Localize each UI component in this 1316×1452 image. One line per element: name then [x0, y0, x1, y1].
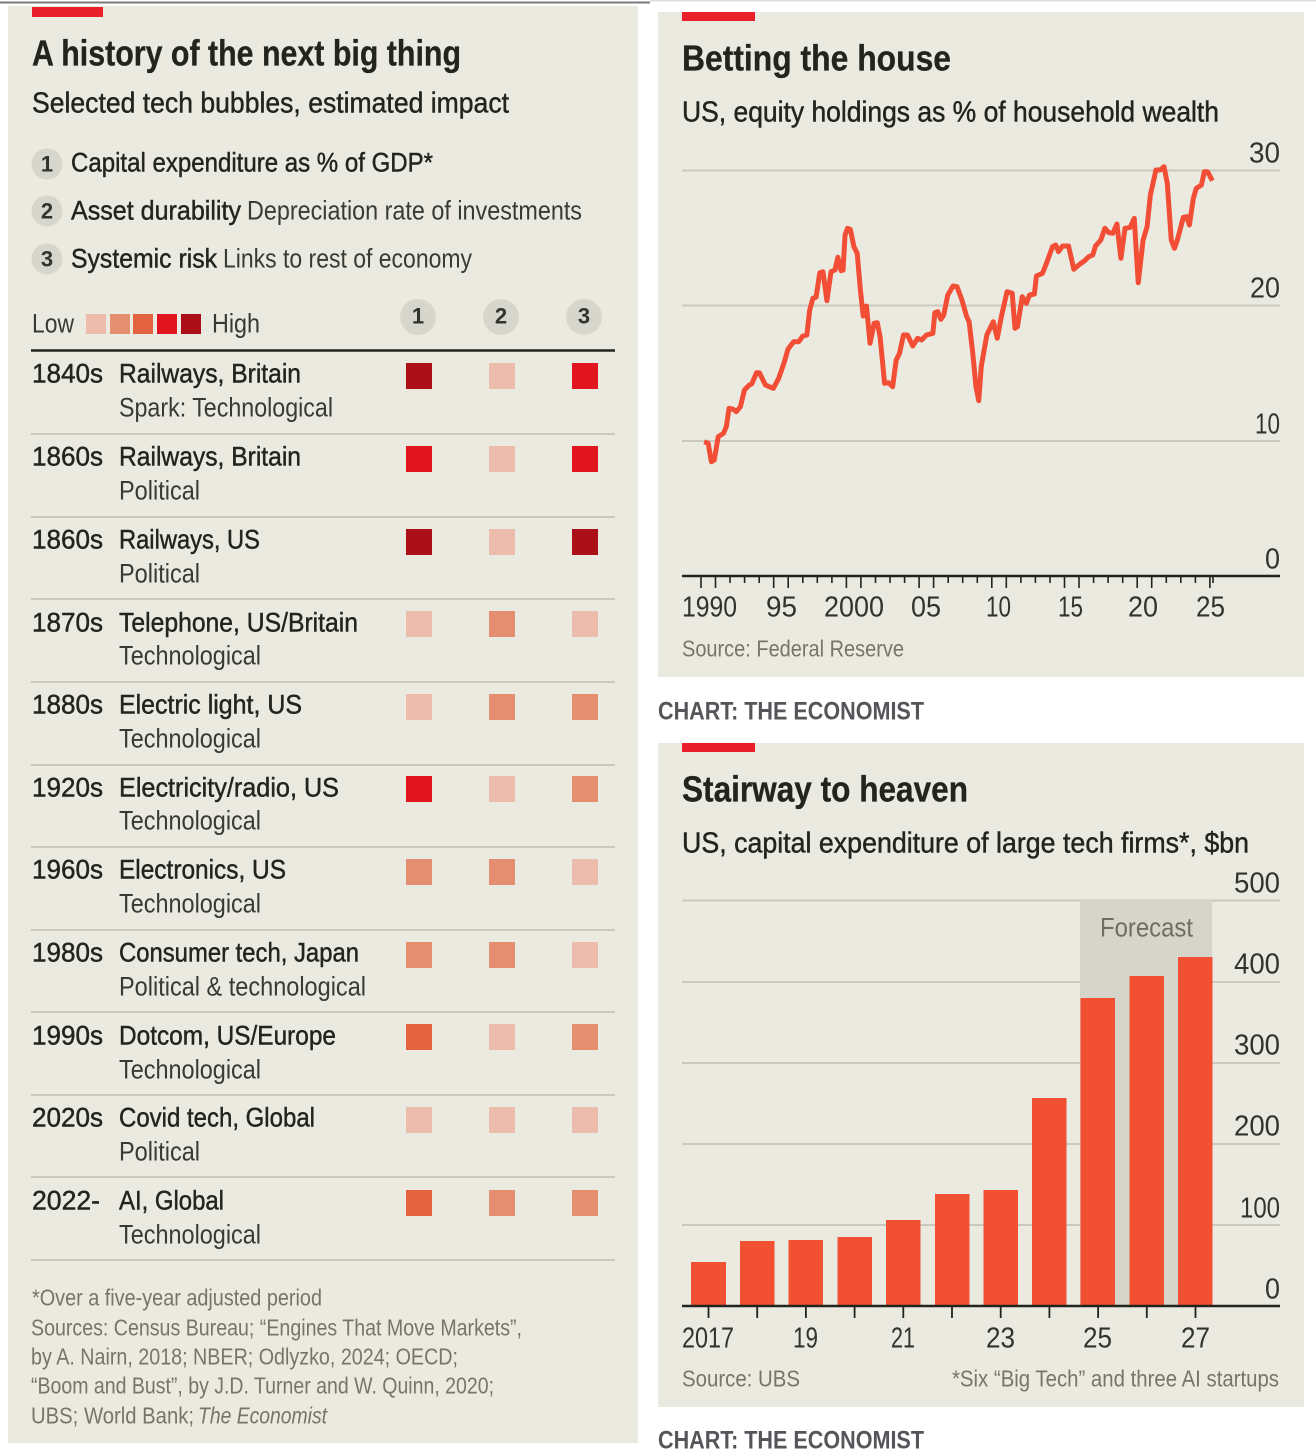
- row: 1960s Electronics: Technological: [119, 888, 261, 918]
- x axis labels: 20: [1128, 591, 1158, 623]
- panel: betting the house: [658, 12, 1304, 677]
- row: 1880s Electric light: Technological: [119, 723, 261, 753]
- y axis labels: 0: [1265, 1273, 1280, 1305]
- x axis labels: 95: [766, 591, 797, 623]
- red tab: [32, 7, 103, 17]
- red tab: [682, 12, 755, 21]
- y axis labels: 30: [1249, 137, 1280, 169]
- y axis labels: 10: [1255, 408, 1280, 440]
- key item 3: Systemic risk: [71, 243, 217, 273]
- key item 2: [32, 195, 582, 226]
- x axis labels: 1990: [682, 591, 737, 623]
- row: 1870s Telephone: 1870s: [32, 607, 103, 637]
- row: 1980s Consumer tech: [32, 937, 598, 1001]
- row: 2022- AI: Technological: [119, 1219, 261, 1249]
- x axis labels: 10: [986, 591, 1011, 623]
- x axis labels: 2017: [682, 1322, 734, 1354]
- panel: stairway to heaven: [658, 743, 1304, 1407]
- row: 1840s Railways, Britain: Railways, Britain: [119, 358, 301, 388]
- y axis labels: 20: [1250, 272, 1280, 304]
- panel: history of tech bubbles: [8, 6, 638, 1443]
- key item 3: 3: [41, 246, 53, 271]
- row: 1860s Railways, Britain: [32, 441, 598, 505]
- row: 1960s Electronics: 1960s: [32, 854, 103, 884]
- row: 1960s Electronics: [32, 854, 598, 918]
- x axis labels: 25: [1083, 1322, 1112, 1354]
- source: Source: UBS: [682, 1365, 800, 1391]
- title: A history of the next big thing: [32, 32, 461, 73]
- y axis labels: [1249, 137, 1280, 575]
- x axis labels: 05: [911, 591, 941, 623]
- row: 1860s Railways, US: 1860s: [32, 524, 103, 554]
- key item 1: 1: [41, 151, 53, 176]
- column headers: 1: [412, 303, 424, 328]
- row: 1880s Electric light: Electric light, US: [119, 689, 302, 719]
- y axis labels: 100: [1240, 1192, 1280, 1224]
- footnotes and sources: [31, 1284, 522, 1428]
- colour legend low to high: High: [212, 308, 260, 338]
- colour legend low to high: [32, 308, 260, 338]
- key item 2: Asset durability: [71, 195, 241, 225]
- x axis labels: 27: [1181, 1322, 1210, 1354]
- row: 1860s Railways, Britain: Railways, Britain: [119, 441, 301, 471]
- source: Source: Federal Reserve: [682, 635, 904, 661]
- row: 1860s Railways, US: [32, 524, 598, 588]
- red tab: [682, 743, 755, 752]
- row: 1840s Railways, Britain: Spark: Technological: [119, 392, 333, 422]
- credit: CHART: THE ECONOMIST: [658, 697, 924, 725]
- row: 2022- AI: [32, 1185, 598, 1249]
- y axis labels: 400: [1234, 948, 1280, 980]
- title: Betting the house: [682, 37, 951, 78]
- row: 1980s Consumer tech: 1980s: [32, 937, 103, 967]
- footnotes and sources: The Economist: [198, 1402, 328, 1428]
- forecast band: [1080, 900, 1212, 1306]
- row: 1860s Railways, Britain: 1860s: [32, 441, 103, 471]
- y axis labels: [1234, 867, 1280, 1305]
- row: 1860s Railways, Britain: Political: [119, 475, 200, 505]
- row: 1870s Telephone: Telephone, US/Britain: [119, 607, 358, 637]
- column headers: 3: [578, 303, 590, 328]
- row: 2020s Covid tech: [32, 1102, 598, 1166]
- row: 1860s Railways, US: Railways, US: [119, 524, 260, 554]
- column headers: 2: [495, 303, 507, 328]
- x axis labels: 21: [891, 1322, 915, 1354]
- title: Stairway to heaven: [682, 768, 968, 809]
- row: 1980s Consumer tech: Consumer tech, Japan: [119, 937, 359, 967]
- bar chart: capital expenditure: [691, 957, 1212, 1306]
- row: 2020s Covid tech: Covid tech, Global: [119, 1102, 315, 1132]
- row: 1920s Electricity/radio: [32, 772, 598, 835]
- row: 1860s Railways, US: Political: [119, 558, 200, 588]
- row: 1990s Dotcom: [32, 1020, 598, 1084]
- line chart: equity share of household wealth: [704, 167, 1212, 462]
- x axis with ticks: [682, 576, 1280, 588]
- key item 2: 2: [41, 198, 53, 223]
- forecast band: Forecast: [1100, 912, 1193, 942]
- x axis labels: 15: [1058, 591, 1083, 623]
- row: 1880s Electric light: [32, 689, 598, 753]
- x axis labels: [682, 591, 1225, 623]
- row: 1840s Railways, Britain: 1840s: [32, 358, 103, 388]
- x axis labels: 25: [1196, 591, 1225, 623]
- row: 1870s Telephone: [32, 607, 598, 670]
- y axis labels: 500: [1234, 867, 1280, 899]
- subtitle: US, equity holdings as % of household wealth: [682, 96, 1219, 128]
- row: 2020s Covid tech: 2020s: [32, 1102, 103, 1132]
- footnotes and sources: UBS; World Bank;: [31, 1402, 194, 1428]
- footnotes and sources: by A. Nairn, 2018; NBER; Odlyzko, 2024; OECD;: [31, 1343, 458, 1369]
- row: 1990s Dotcom: Technological: [119, 1054, 261, 1084]
- column headers: [400, 299, 602, 335]
- row: 1980s Consumer tech: Political & technological: [119, 971, 366, 1001]
- x axis labels: [682, 1322, 1210, 1354]
- key item 1: Capital expenditure as % of GDP*: [71, 147, 433, 177]
- x axis labels: 19: [793, 1322, 818, 1354]
- subtitle: US, capital expenditure of large tech firms*, $bn: [682, 827, 1249, 859]
- y axis labels: 200: [1234, 1110, 1280, 1142]
- row: 1920s Electricity/radio: Technological: [119, 805, 261, 835]
- footnotes and sources: Sources: Census Bureau; “Engines That Move Markets”,: [31, 1314, 522, 1340]
- x axis labels: 23: [986, 1322, 1015, 1354]
- key item 3: [32, 243, 472, 274]
- footnotes and sources: *Over a five-year adjusted period: [32, 1284, 322, 1310]
- key item 2: Depreciation rate of investments: [247, 195, 582, 225]
- subtitle: Selected tech bubbles, estimated impact: [32, 87, 509, 119]
- key item 3: Links to rest of economy: [223, 243, 472, 273]
- footnotes and sources: “Boom and Bust”, by J.D. Turner and W. Quinn, 2020;: [31, 1372, 494, 1398]
- row: 2020s Covid tech: Political: [119, 1136, 200, 1166]
- row: 1990s Dotcom: 1990s: [32, 1020, 103, 1050]
- row: 1840s Railways, Britain: [32, 358, 598, 422]
- y axis labels: 300: [1234, 1029, 1280, 1061]
- y axis labels: 0: [1265, 543, 1280, 575]
- row: 1960s Electronics: Electronics, US: [119, 854, 286, 884]
- row: 1990s Dotcom: Dotcom, US/Europe: [119, 1020, 336, 1050]
- row: 1870s Telephone: Technological: [119, 640, 261, 670]
- row: 1920s Electricity/radio: 1920s: [32, 772, 103, 802]
- row: 1880s Electric light: 1880s: [32, 689, 103, 719]
- x axis labels: 2000: [824, 591, 884, 623]
- x axis with ticks: [682, 1306, 1280, 1318]
- row: 2022- AI: 2022-: [32, 1185, 100, 1215]
- colour legend low to high: Low: [32, 308, 74, 338]
- row: 1920s Electricity/radio: Electricity/radio, US: [119, 772, 339, 802]
- row: 2022- AI: AI, Global: [119, 1185, 224, 1215]
